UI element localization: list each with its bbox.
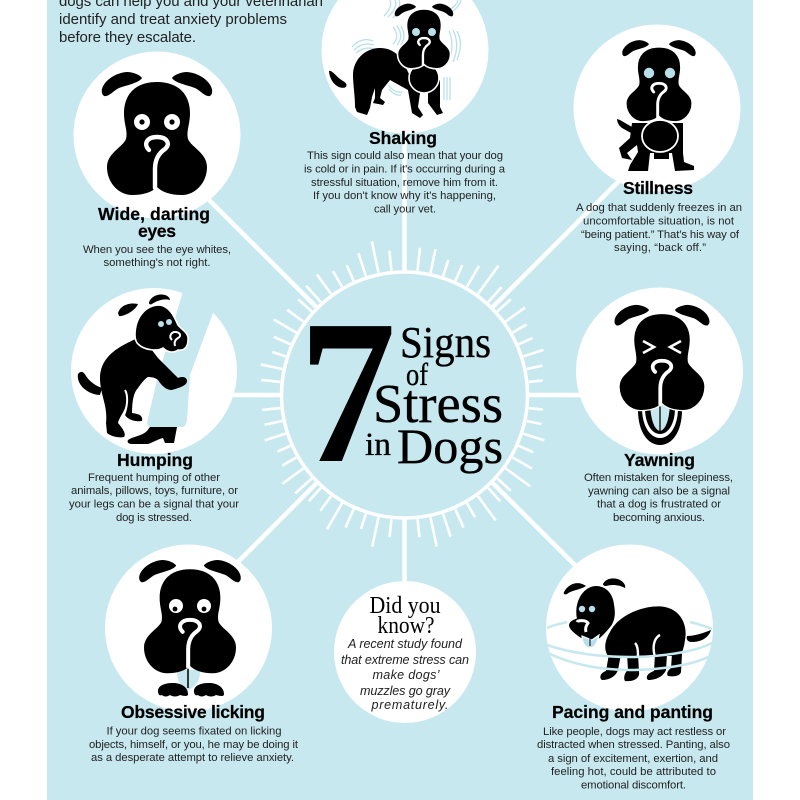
icon: humping dog (78, 294, 188, 437)
description: something's not right. (104, 257, 210, 269)
description: as a desperate attempt to relieve anxiety. (91, 752, 294, 764)
description (89, 726, 299, 764)
callout heading: know? (378, 613, 434, 639)
description: feeling hot, could be attributed to (551, 766, 716, 778)
heading second line: eyes (138, 221, 176, 241)
heading: Pacing and panting (552, 702, 713, 722)
central title badge (282, 272, 528, 518)
description (83, 244, 231, 269)
description: distracted when stressed. Panting, also (537, 739, 730, 751)
panel: pacing and panting (537, 544, 730, 792)
heading: Wide, darting (98, 204, 210, 224)
central title badge: Dogs (397, 418, 503, 474)
description: uncomfortable situation, is not (583, 216, 735, 228)
description (576, 202, 742, 254)
description: Often mistaken for sleepiness, (584, 472, 733, 484)
connector spokes (154, 50, 659, 652)
description: A dog that suddenly freezes in an (576, 202, 742, 214)
description: dog is stressed. (116, 512, 192, 524)
panel: stillness (574, 24, 742, 254)
description: call your vet. (374, 204, 436, 216)
heading: Humping (117, 450, 193, 470)
icon: pacing dog (564, 578, 711, 681)
description (69, 472, 239, 524)
description (584, 472, 733, 524)
icon: shoe (128, 427, 177, 444)
panel: wide, darting eyes (74, 52, 240, 269)
callout text (341, 637, 469, 712)
panel: yawning (576, 288, 743, 524)
intro text (59, 0, 323, 46)
central title badge: of (406, 356, 428, 392)
icon: licking dog (139, 560, 241, 696)
description: a sign of excitement, exertion, and (548, 753, 718, 765)
heading: Stillness (623, 178, 693, 198)
callout text: muzzles go gray (360, 684, 451, 698)
icon: dog with wide eyes (102, 72, 212, 195)
description: is cold or in pain. If it's occurring during a (304, 164, 506, 176)
description: becoming anxious. (613, 512, 705, 524)
heading: Obsessive licking (121, 702, 265, 722)
description: emotional discomfort. (581, 780, 686, 792)
panel: humping (69, 278, 239, 524)
description: stressful situation, remove him from it. (311, 177, 498, 189)
description: Frequent humping of other (88, 472, 220, 484)
icon: shaking dog (329, 0, 461, 118)
panel: shaking (304, 0, 506, 216)
description: If your dog seems fixated on licking (106, 726, 282, 738)
motion rings (547, 622, 712, 670)
description: animals, pillows, toys, furniture, or (71, 485, 238, 497)
callout heading (370, 593, 440, 639)
intro text: before they escalate. (59, 29, 196, 46)
sunburst rays (261, 241, 544, 547)
central title badge: in (365, 427, 391, 463)
description: This sign could also mean that your dog (307, 150, 503, 162)
description: saying, “back off.” (614, 242, 706, 254)
icon: still dog (617, 40, 696, 171)
panel: did you know (334, 581, 476, 723)
heading: Shaking (369, 128, 437, 148)
callout text: A recent study found (347, 637, 463, 651)
callout text: make dogs’ (372, 668, 440, 682)
icon: yawning dog (615, 305, 709, 445)
callout heading: Did you (370, 593, 440, 619)
intro text: identify and treat anxiety problems (59, 11, 287, 28)
panel: obsessive licking (89, 544, 299, 764)
description: that a dog is frustrated or (597, 498, 721, 510)
description: If you don't know why it's happening, (313, 190, 496, 202)
description: objects, himself, or you, he may be doing it (89, 739, 299, 751)
human leg cut-out (147, 278, 232, 427)
description (304, 150, 506, 216)
description: your legs can be a signal that your (69, 498, 239, 510)
description (537, 726, 730, 792)
description: “being patient.” That’s his way of (581, 229, 740, 241)
callout text: prematurely. (370, 698, 448, 712)
description: Like people, dogs may act restless or (543, 726, 726, 738)
description: yawning can also be a signal (588, 486, 730, 498)
central title badge: Signs (400, 318, 491, 367)
heading: Yawning (624, 450, 695, 470)
central title badge: 7 (299, 277, 396, 506)
callout text: that extreme stress can (341, 653, 469, 667)
description: When you see the eye whites, (83, 244, 231, 256)
central title badge: Stress (373, 373, 503, 434)
